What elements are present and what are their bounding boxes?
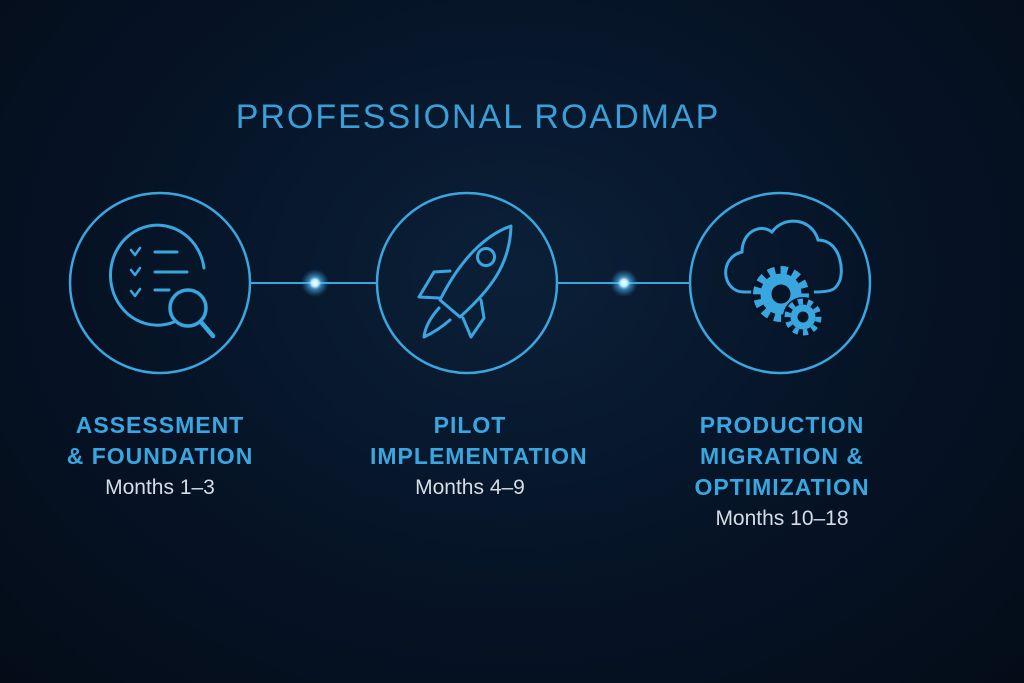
stage 3 label: OPTIMIZATION: [694, 474, 870, 500]
circle 1 with checklist icon: [70, 193, 250, 373]
stage 3 label: PRODUCTION: [700, 412, 864, 438]
stage 3 label: [694, 412, 870, 530]
stage 3 label: Months 10–18: [715, 507, 849, 530]
stage 2 label: Months 4–9: [415, 476, 525, 499]
stage 1 label: [67, 412, 253, 499]
stage 1 label: ASSESSMENT: [76, 412, 244, 438]
stage 2 label: IMPLEMENTATION: [370, 443, 588, 469]
circle 2 with rocket icon: [377, 193, 557, 373]
stage 2 label: PILOT: [434, 412, 506, 438]
stage 2 label: [370, 412, 588, 499]
stage 1 label: Months 1–3: [105, 476, 215, 499]
connector 1: [250, 269, 377, 297]
connector 2: [557, 269, 690, 297]
stage 3 label: MIGRATION &: [700, 443, 864, 469]
stage 1 label: & FOUNDATION: [67, 443, 253, 469]
circle 3 with cloud gears icon: [690, 193, 870, 373]
title: PROFESSIONAL ROADMAP: [236, 98, 720, 136]
